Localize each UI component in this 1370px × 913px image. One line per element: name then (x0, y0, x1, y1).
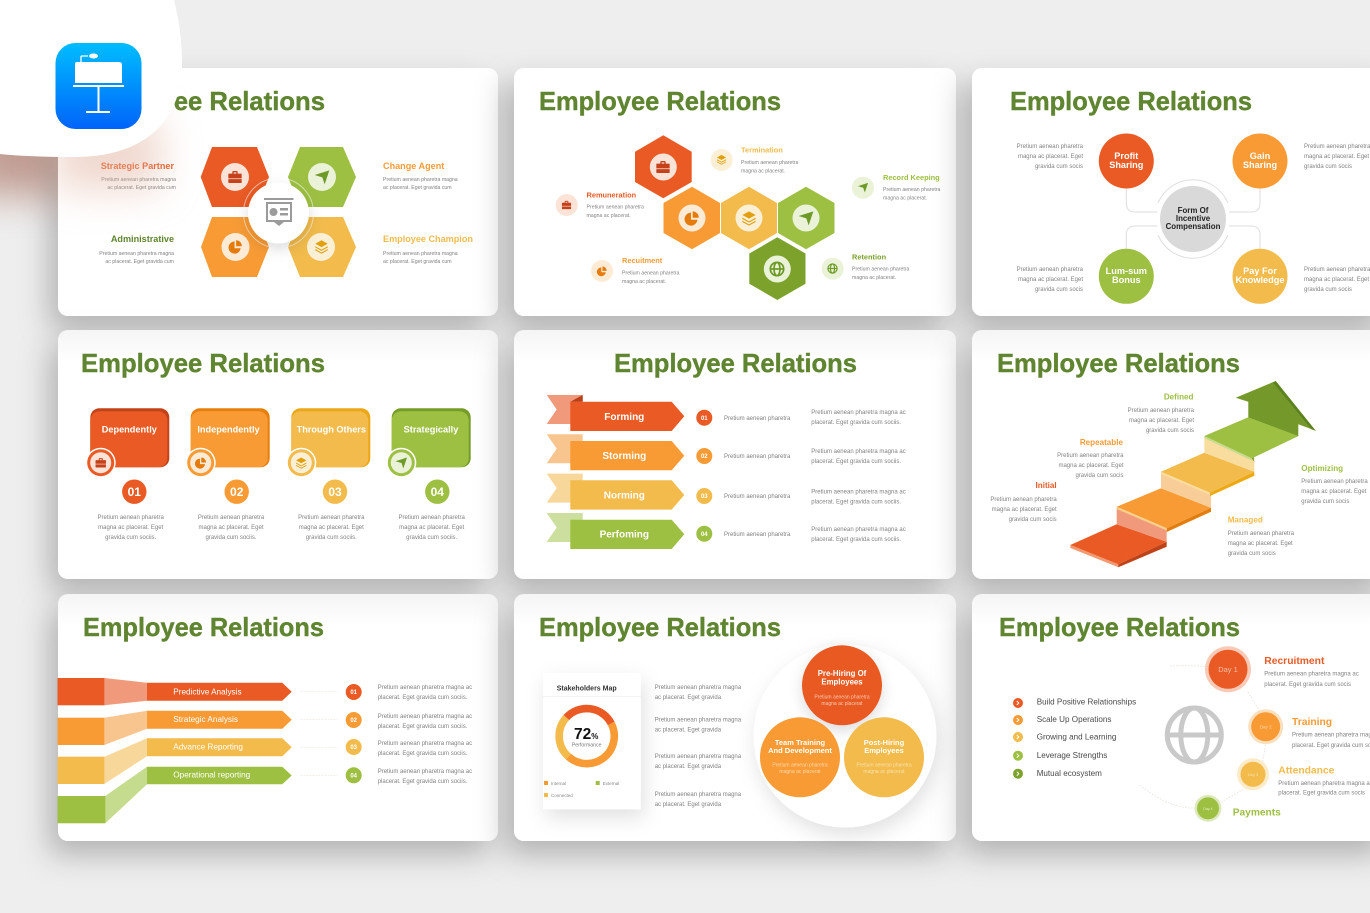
label: Payments: Payments (1233, 808, 1281, 818)
text: card 1: magna ac placerat. Eget (98, 525, 164, 531)
title: Employee Relations (81, 348, 325, 378)
circle: Post-Hiring Employees: magna ac placerat (863, 769, 905, 775)
badge shadow on background (0, 115, 65, 195)
text: row 4: Pretium aenean pharetra magna ac (811, 527, 906, 533)
center presentation icon (244, 178, 314, 248)
number 03: 03 (350, 745, 358, 751)
label: Attendance: Pretium aenean pharetra magna ac (1278, 781, 1370, 787)
label: Employee Champion: Pretium aenean pharetra magna (383, 251, 458, 257)
circle: Profit Sharing: Sharing (1109, 160, 1143, 170)
circle: Lum-sum Bonus (1099, 249, 1154, 304)
text: card 3: Pretium aenean pharetra (298, 515, 365, 521)
label: Strategic Partner (101, 161, 176, 191)
number 04: 04 (701, 532, 708, 538)
text: row 4 (378, 769, 472, 785)
circle: Team Training And Development: Pretium aenean pharetra (772, 762, 828, 768)
title: Employee Relations (539, 612, 781, 642)
label: Managed: gravida cum socis (1228, 551, 1276, 557)
text: row 2: placerat. Eget gravida cum sociis. (811, 459, 901, 465)
text: row 3 (724, 490, 906, 506)
number 03: 03 (701, 494, 708, 500)
label: Termination: Termination (741, 146, 783, 154)
arrow: Operational reporting (58, 767, 292, 823)
number 04: 04 (350, 774, 358, 780)
bullet list: Scale Up Operations (1037, 715, 1111, 724)
stakeholders card: 72% (574, 726, 598, 743)
circle: Pay For Knowledge (1232, 249, 1288, 304)
text: top left (1017, 144, 1084, 170)
number 03 (346, 739, 362, 755)
label: Record Keeping: magna ac placerat. (883, 196, 927, 202)
number 03 (696, 488, 712, 504)
label: Administrative: Pretium aenean pharetra magna (99, 251, 174, 257)
label: Strategic Partner: ac placerat. Eget gravida cum (107, 185, 176, 191)
title: Employee Relations (997, 348, 1240, 378)
circle: Post-Hiring Employees: Post-Hiring (864, 738, 905, 747)
label: Change Agent: Pretium aenean pharetra magna (383, 177, 458, 183)
node: Day 3: Day 3 (1248, 772, 1259, 777)
node: Day 1: Day 1 (1218, 665, 1238, 674)
label: Defined: Defined (1164, 392, 1194, 402)
label: Administrative: ac placerat. Eget gravida cum (105, 259, 174, 265)
badge shadow on panel (55, 118, 160, 190)
ribbon: Perfoming: Perfoming (600, 530, 649, 540)
circle: Profit Sharing (1099, 134, 1154, 188)
legend: External (603, 781, 619, 786)
panel: four cards (58, 330, 498, 579)
number 02: 02 (701, 454, 708, 460)
label: Retention: Retention (852, 252, 887, 262)
text: row 3: placerat. Eget gravida cum sociis. (378, 751, 468, 757)
text: card 1 (98, 515, 165, 541)
card: Independently: Independently (197, 425, 261, 435)
stakeholders card: Stakeholders Map (557, 686, 617, 692)
text: row 2: Pretium aenean pharetra (724, 454, 791, 460)
text: row 2 (378, 714, 472, 730)
arrow: Predictive Analysis (58, 678, 292, 705)
circle: Pre-Hiring Of Employees (802, 645, 882, 725)
center circle: Form Of (1178, 206, 1209, 215)
circle: Pre-Hiring Of Employees: Pretium aenean pharetra (814, 694, 870, 700)
staircase arrow (1070, 381, 1316, 567)
label: Termination: Pretium aenean pharetra (741, 160, 799, 166)
label: Managed: Pretium aenean pharetra (1228, 531, 1295, 537)
stakeholders card (543, 673, 641, 809)
panel: stakeholders (514, 594, 956, 841)
number 01: 01 (350, 690, 358, 696)
label: Training: Training (1292, 717, 1332, 728)
card: Strategically: Strategically (404, 425, 459, 435)
dotted connectors (301, 692, 337, 775)
text: top right: gravida cum socis (1304, 164, 1352, 170)
label: Attendance: placerat. Eget gravida cum socis (1278, 790, 1365, 796)
arrow: Predictive Analysis: Predictive Analysis (173, 687, 242, 696)
circle: Pay For Knowledge: Pay For (1243, 266, 1277, 276)
label: Repeatable: Pretium aenean pharetra (1057, 453, 1124, 459)
donut chart (559, 709, 614, 764)
text: row 2: Pretium aenean pharetra magna ac (378, 714, 472, 720)
card: Through Others (286, 408, 370, 478)
text: bottom left: gravida cum socis (1035, 287, 1083, 293)
label: Attendance (1278, 766, 1370, 796)
label: Administrative: Administrative (111, 234, 174, 244)
number 01: 01 (701, 416, 708, 422)
label: Remuneration: magna ac placerat. (586, 213, 631, 219)
text: card 4 (399, 515, 466, 541)
arrow: Strategic Analysis: Strategic Analysis (173, 715, 238, 724)
text: row 4 (724, 527, 906, 543)
label: Record Keeping: Record Keeping (883, 173, 940, 182)
label: Training (1292, 717, 1370, 749)
text: row 2 (724, 449, 906, 465)
label: Record Keeping (852, 173, 941, 202)
label: Defined: magna ac placerat. Eget (1129, 418, 1194, 424)
node: Day 4 (1194, 795, 1222, 822)
node: Day 2 (1248, 709, 1283, 744)
label: Defined: gravida cum socis (1146, 428, 1194, 434)
label: Strategic Partner: Strategic Partner (101, 161, 174, 171)
label: Recruitment: Pretium aenean pharetra magna ac (1264, 672, 1359, 678)
text: bottom left: Pretium aenean pharetra (1017, 267, 1084, 273)
hexagon: green (778, 187, 834, 249)
number 03 (323, 480, 347, 504)
ribbon: Norming (547, 474, 684, 510)
circle: Pre-Hiring Of Employees: Employees (821, 678, 863, 687)
text: card 2: Pretium aenean pharetra (198, 515, 265, 521)
node: Day 2: Day 2 (1260, 724, 1272, 730)
panel: incentive compensation (972, 68, 1370, 316)
text: bottom right (1304, 267, 1370, 293)
text: row 1 (724, 410, 906, 426)
label: Change Agent (383, 161, 458, 191)
hexagon: orange (664, 187, 720, 249)
text: card 2: magna ac placerat. Eget (198, 525, 264, 531)
circle: Team Training And Development (760, 717, 840, 797)
label: Initial: Initial (1036, 481, 1057, 490)
text: row 4: placerat. Eget gravida cum sociis. (378, 779, 468, 785)
circle: Gain Sharing (1232, 134, 1288, 188)
label: Employee Champion (383, 234, 473, 265)
number 01 (696, 410, 712, 426)
title: Employee Relations (83, 612, 324, 642)
ribbon: Storming: Storming (602, 451, 646, 462)
text: row 1 (378, 685, 472, 701)
card: Strategically (386, 408, 471, 478)
hexagon: red (635, 135, 692, 198)
text: row 4: Pretium aenean pharetra magna ac (378, 769, 472, 775)
number 04 (425, 480, 449, 504)
circle: Lum-sum Bonus: Bonus (1112, 275, 1141, 285)
bullet list: Leverage Strengths (1037, 751, 1107, 760)
card: Dependently: Dependently (102, 425, 158, 435)
ribbon: Perfoming (547, 513, 684, 549)
text: card 2 (198, 515, 265, 541)
panel: honeycomb (514, 68, 956, 316)
text: card 4: gravida cum sociis. (406, 535, 458, 541)
center circle: Compensation (1166, 222, 1221, 231)
ribbon: Storming (547, 434, 684, 470)
label: Recruitment: placerat. Eget gravida cum socis (1264, 682, 1351, 688)
text: card 3 (298, 515, 365, 541)
circle: Team Training And Development: Team Training (775, 738, 826, 747)
text: row 4: placerat. Eget gravida cum sociis. (811, 537, 901, 543)
title: Employee Relations (1010, 86, 1252, 116)
text: row 1: Pretium aenean pharetra (724, 416, 791, 422)
panel: funnel arrows (58, 594, 498, 841)
text: list: ac placerat. Eget gravida (655, 764, 722, 770)
circle: Lum-sum Bonus: Lum-sum (1106, 266, 1147, 276)
dotted timeline (1140, 666, 1266, 808)
text: list: ac placerat. Eget gravida (655, 728, 722, 734)
hexagon: yellow (288, 217, 356, 277)
text: top left: gravida cum socis (1035, 164, 1083, 170)
ribbon: Forming (547, 395, 684, 431)
circle: Team Training And Development: And Development (768, 746, 832, 755)
text: row 1: Pretium aenean pharetra magna ac (811, 410, 906, 416)
circle: Profit Sharing: Profit (1114, 151, 1138, 161)
hexagon: green (288, 147, 356, 207)
label: Optimizing: Pretium aenean pharetra (1301, 479, 1368, 485)
badge: keynote app (0, 0, 182, 157)
text: list: ac placerat. Eget gravida (655, 802, 722, 808)
title: Employee Relations (81, 86, 325, 116)
label: Retention (822, 252, 910, 281)
label: Record Keeping: Pretium aenean pharetra (883, 187, 941, 193)
label: Defined: Pretium aenean pharetra (1128, 408, 1195, 414)
text: row 4: Pretium aenean pharetra (724, 532, 791, 538)
text: top left: magna ac placerat. Eget (1018, 154, 1083, 160)
number 02 (346, 712, 362, 728)
number 02: 02 (350, 718, 358, 724)
label: Managed (1228, 516, 1295, 557)
icon: keynote (56, 43, 142, 129)
text: bottom right: gravida cum socis (1304, 287, 1352, 293)
circle: Post-Hiring Employees: Pretium aenean pharetra (856, 762, 912, 768)
text: list: ac placerat. Eget gravida (655, 695, 722, 701)
text: bottom right: magna ac placerat. Eget (1304, 277, 1369, 283)
arrow: Advance Reporting (58, 738, 292, 784)
text: top right: Pretium aenean pharetra (1304, 144, 1370, 150)
label: Termination: magna ac placerat. (741, 168, 785, 174)
text: top right (1304, 144, 1370, 170)
label: Recruitment: Recuitment (622, 256, 663, 265)
text: row 1: Pretium aenean pharetra magna ac (378, 685, 472, 691)
text: card 1: Pretium aenean pharetra (98, 515, 165, 521)
label: Optimizing: magna ac placerat. Eget (1301, 489, 1367, 495)
arrow: Advance Reporting: Advance Reporting (173, 742, 243, 752)
card: Through Others: Through Others (297, 425, 366, 435)
text: card 3: gravida cum sociis. (306, 535, 357, 541)
text: row 3: Pretium aenean pharetra magna ac (811, 490, 906, 496)
text: row 3: placerat. Eget gravida cum sociis. (811, 500, 901, 506)
text: bottom left (1017, 267, 1084, 293)
legend: Internal (551, 781, 566, 786)
label: Repeatable (1057, 438, 1124, 479)
label: Retention: magna ac placerat. (852, 275, 896, 281)
text: bottom left: magna ac placerat. Eget (1018, 277, 1083, 283)
stakeholders card: Performance (572, 742, 602, 748)
connector lines (1126, 180, 1260, 258)
hexagon: red (201, 147, 269, 207)
label: Recruitment: magna ac placerat. (622, 279, 666, 285)
title: Employee Relations (539, 86, 781, 116)
label: Optimizing: gravida cum socis (1301, 499, 1349, 505)
circle: Gain Sharing: Sharing (1243, 160, 1277, 170)
ribbon: Forming: Forming (604, 412, 644, 423)
text: row 2: Pretium aenean pharetra magna ac (811, 449, 906, 455)
circle: Gain Sharing: Gain (1250, 151, 1271, 161)
text: list: Pretium aenean pharetra magna (655, 754, 742, 760)
text: list: Pretium aenean pharetra magna (655, 685, 742, 691)
title: Employee Relations (614, 348, 857, 378)
label: Recruitment: Pretium aenean pharetra (622, 270, 680, 276)
label: Remuneration: Pretium aenean pharetra (586, 204, 644, 210)
bullet list: Mutual ecosystem (1037, 769, 1102, 778)
number 04 (346, 767, 362, 783)
label: Recruitment (591, 256, 680, 285)
legend: Connected (551, 793, 573, 798)
text: top right: magna ac placerat. Eget (1304, 154, 1369, 160)
text: row 1: placerat. Eget gravida cum sociis. (378, 695, 468, 701)
text: row 3: Pretium aenean pharetra (724, 494, 791, 500)
number 01 (122, 480, 146, 504)
circle: Post-Hiring Employees (844, 717, 924, 797)
label: Repeatable: Repeatable (1080, 438, 1123, 447)
hexagon: yellow (721, 187, 777, 249)
text: row 2: placerat. Eget gravida cum sociis. (378, 724, 468, 730)
label: Recruitment (1264, 656, 1359, 688)
text: list (655, 685, 742, 808)
arrow: Operational reporting: Operational reporting (173, 770, 251, 780)
panel: timeline (972, 594, 1370, 841)
label: Remuneration: Remuneration (586, 190, 637, 200)
node: Day 3 (1237, 758, 1269, 790)
title: Employee Relations (999, 612, 1240, 642)
label: Optimizing (1301, 464, 1368, 505)
label: Change Agent: ac placerat. Eget gravida cum (383, 185, 452, 191)
bullet list: Growing and Learning (1037, 733, 1116, 742)
node: Day 1 (1205, 646, 1251, 692)
label: Retention: Pretium aenean pharetra (852, 266, 910, 272)
circle: Team Training And Development: magna ac placerat (779, 769, 821, 775)
circle: Pre-Hiring Of Employees: Pre-Hiring Of (818, 669, 867, 678)
label: Initial: magna ac placerat. Eget (992, 507, 1057, 513)
text: list: Pretium aenean pharetra magna (655, 718, 742, 724)
label: Optimizing: Optimizing (1301, 464, 1343, 473)
text: card 2: gravida cum sociis. (205, 535, 257, 541)
text: card 4: magna ac placerat. Eget (399, 525, 465, 531)
number 01: 01 (128, 485, 141, 499)
number 02 (696, 448, 712, 464)
circle: Pre-Hiring Of Employees: magna ac placerat (821, 701, 863, 707)
label: Strategic Partner: Pretium aenean pharetra magna (101, 177, 176, 183)
label: Change Agent: Change Agent (383, 161, 444, 171)
label: Initial: Pretium aenean pharetra (990, 497, 1057, 503)
text: row 3 (378, 741, 472, 757)
label: Termination (711, 146, 799, 174)
text: card 1: gravida cum sociis. (105, 535, 157, 541)
label: Initial (990, 481, 1057, 523)
text: row 3: Pretium aenean pharetra magna ac (378, 741, 472, 747)
number 04 (696, 526, 712, 542)
panel: staircase (972, 330, 1370, 579)
icon: globe (1167, 708, 1222, 762)
panel: ribbons (514, 330, 956, 579)
number 02 (224, 480, 249, 504)
text: list: Pretium aenean pharetra magna (655, 792, 742, 798)
label: Employee Champion: ac placerat. Eget gravida cum (383, 259, 452, 265)
card: Dependently (86, 408, 169, 478)
label: Administrative (99, 234, 174, 265)
label: Attendance: Attendance (1278, 766, 1335, 776)
ribbon: Norming: Norming (604, 490, 645, 502)
bullet list (1013, 698, 1136, 779)
number 01 (346, 684, 362, 700)
label: Repeatable: gravida cum socis (1075, 473, 1124, 479)
hexagon: orange (201, 217, 269, 277)
number 03: 03 (328, 485, 342, 499)
text: row 1: placerat. Eget gravida cum sociis. (811, 420, 901, 426)
node: Day 4: Day 4 (1203, 807, 1213, 811)
legend (544, 781, 619, 798)
label: Defined (1128, 392, 1195, 434)
circle: Pay For Knowledge: Knowledge (1235, 275, 1285, 285)
number 04: 04 (431, 485, 444, 499)
label: Remuneration (556, 190, 644, 219)
hexagon: dark green (749, 237, 806, 300)
text: card 4: Pretium aenean pharetra (399, 515, 466, 521)
text: bottom right: Pretium aenean pharetra (1304, 267, 1370, 273)
center circle (1160, 186, 1226, 252)
label: Initial: gravida cum socis (1009, 517, 1057, 523)
text: top left: Pretium aenean pharetra (1017, 144, 1084, 150)
center circle: Incentive (1176, 214, 1211, 223)
card: Independently (186, 408, 270, 478)
label: Employee Champion: Employee Champion (383, 234, 473, 244)
label: Managed: Managed (1228, 516, 1263, 524)
bullet list: Build Positive Relationships (1037, 698, 1136, 707)
panel: hexagon roles (58, 68, 498, 316)
large white circle (754, 644, 936, 828)
text: card 3: magna ac placerat. Eget (299, 525, 364, 531)
label: Repeatable: magna ac placerat. Eget (1058, 463, 1124, 469)
label: Recruitment: Recruitment (1264, 656, 1325, 667)
circle: Post-Hiring Employees: Employees (864, 746, 904, 755)
arrow: Strategic Analysis (58, 711, 292, 745)
label: Managed: magna ac placerat. Eget (1228, 541, 1293, 547)
number 02: 02 (230, 485, 244, 499)
